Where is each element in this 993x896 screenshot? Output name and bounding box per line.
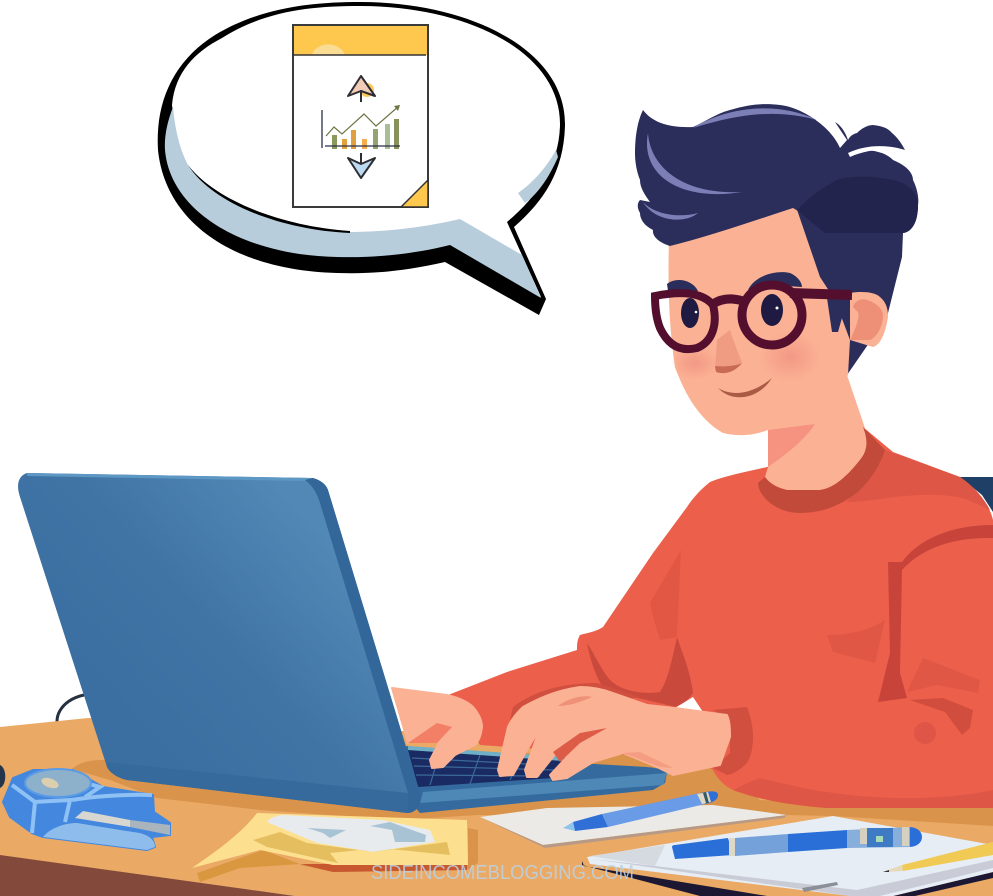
chart card in bubble bbox=[293, 25, 428, 207]
base front bbox=[420, 773, 667, 803]
person bbox=[448, 104, 993, 808]
white note paper bbox=[480, 791, 787, 848]
bubble outline and shadow bbox=[158, 2, 565, 315]
card header bbox=[294, 26, 427, 55]
big blue pen bbox=[672, 827, 922, 859]
eyebrows bbox=[667, 280, 698, 291]
blush bbox=[671, 346, 719, 380]
screen lower bbox=[107, 762, 408, 813]
down arrow bbox=[348, 153, 375, 178]
collar bbox=[758, 427, 885, 513]
face bbox=[669, 198, 850, 435]
glasses bbox=[655, 285, 852, 349]
hem shade bbox=[733, 778, 993, 808]
tape dispenser bbox=[3, 769, 170, 850]
desk front bbox=[0, 855, 295, 896]
bar chart bbox=[322, 105, 400, 149]
key strip bbox=[408, 746, 563, 761]
laptop base bbox=[400, 746, 667, 813]
desk bbox=[0, 695, 993, 896]
hair highlights bbox=[647, 133, 742, 194]
sweater bbox=[448, 427, 993, 808]
arm shades bbox=[827, 620, 885, 663]
panel lines bbox=[12, 780, 152, 833]
sleeve crease bbox=[587, 637, 693, 707]
pencil bbox=[902, 842, 993, 871]
blue pen small bbox=[563, 791, 718, 831]
ear bbox=[850, 292, 888, 347]
desk top bbox=[0, 718, 993, 896]
bubble tint bbox=[165, 107, 541, 298]
hands bbox=[392, 687, 730, 780]
nose bbox=[715, 330, 742, 370]
left hand bbox=[392, 688, 482, 768]
laptop screen bbox=[18, 473, 420, 813]
desk shadow bbox=[72, 750, 993, 826]
speech bubble bbox=[158, 2, 565, 315]
chair bbox=[960, 477, 993, 512]
dial bbox=[25, 769, 91, 797]
back-arm crease bbox=[878, 525, 993, 702]
folded yellow paper bbox=[192, 813, 478, 882]
keyboard bbox=[408, 750, 565, 787]
shoulder shade bbox=[847, 450, 990, 510]
neck shade bbox=[768, 424, 815, 467]
hair bbox=[635, 104, 918, 246]
laptop bbox=[18, 473, 667, 813]
notebook bbox=[582, 816, 993, 896]
screen side bbox=[305, 478, 420, 813]
cuff bbox=[713, 707, 753, 775]
bubble body bbox=[172, 6, 560, 297]
card bbox=[293, 25, 428, 207]
cable bbox=[57, 695, 98, 737]
back hair bbox=[770, 200, 918, 375]
gap under arm bbox=[675, 697, 703, 712]
card corner bbox=[401, 180, 428, 207]
spiral bbox=[802, 882, 838, 892]
watermark: SIDEINCOMEBLOGGING.COM bbox=[371, 862, 634, 884]
right hand bbox=[498, 687, 730, 780]
eyes bbox=[681, 298, 699, 328]
screen top edge bbox=[27, 473, 313, 481]
mouth bbox=[718, 378, 772, 397]
up arrow bbox=[348, 76, 375, 102]
sideburn bbox=[827, 298, 847, 332]
neck bbox=[765, 375, 868, 490]
hair shade bbox=[797, 177, 918, 233]
